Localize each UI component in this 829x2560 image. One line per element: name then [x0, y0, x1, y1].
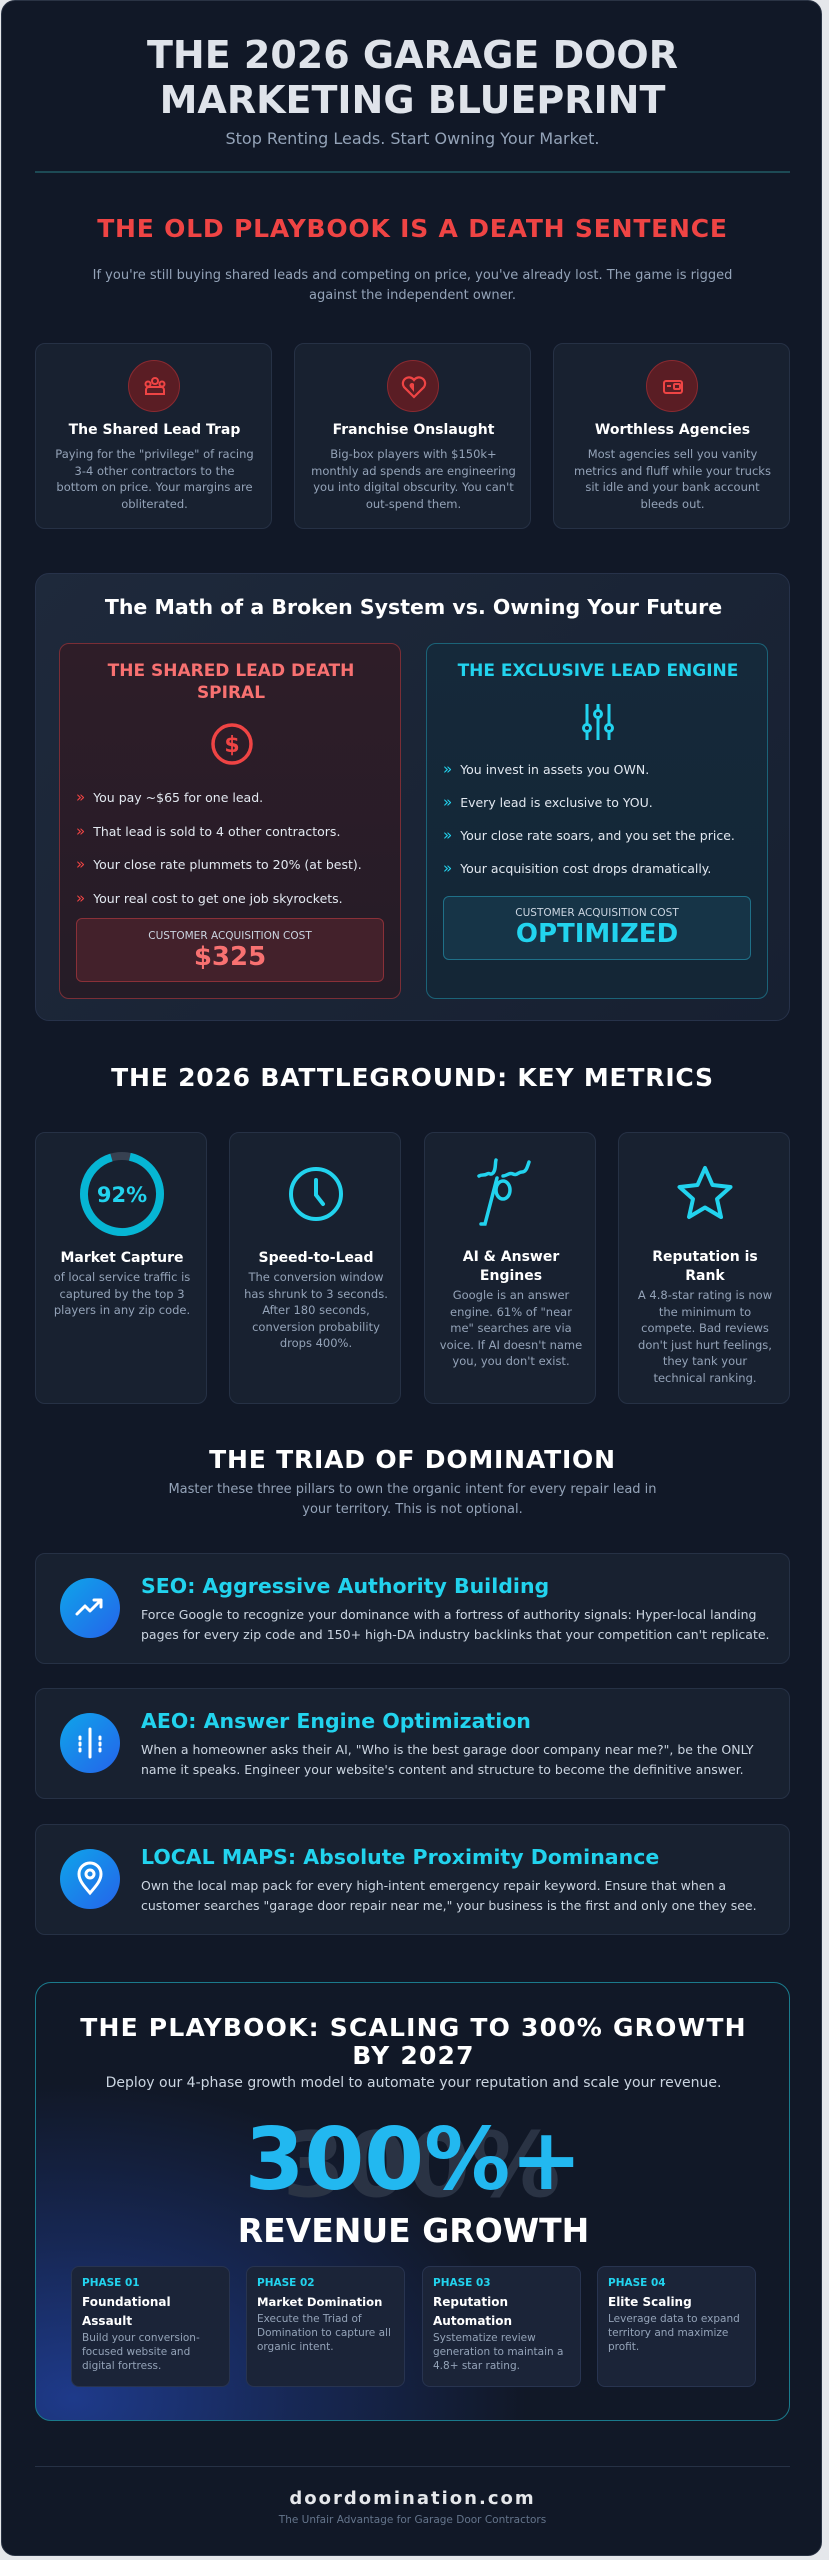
phase 02: Market Domination	[257, 2295, 382, 2309]
bullet list	[76, 788, 362, 906]
panel: SEO	[35, 1553, 790, 1664]
triad intro: Master these three pillars to own the organic intent for every repair lead in your territory. This is not optional.	[168, 1482, 657, 1517]
phase 04: Elite Scaling	[608, 2295, 692, 2309]
card text: Most agencies sell you vanity metrics and fluff while your trucks sit idle and your bank account bleeds out.	[574, 447, 771, 510]
box heading: THE EXCLUSIVE LEAD ENGINE	[458, 661, 738, 681]
card title: The Shared Lead Trap	[69, 422, 240, 438]
panel: AEO	[35, 1688, 790, 1799]
CAC box: $325: CUSTOMER ACQUISITION COST	[148, 930, 312, 942]
bullet list: » You invest in assets you OWN.	[443, 760, 649, 778]
card title: Worthless Agencies	[595, 422, 750, 438]
metric title: Engines	[480, 1268, 542, 1284]
heading	[80, 2013, 747, 2070]
bullet list	[443, 760, 735, 877]
phase 03: Systematize review generation to maintain a 4.8+ star rating.	[433, 2332, 563, 2372]
metric: speed to lead	[229, 1132, 401, 1404]
icon: voice	[60, 1713, 120, 1773]
phase 01: PHASE 01	[82, 2277, 140, 2289]
bullet list: » Your close rate plummets to 20% (at best).	[76, 855, 362, 873]
heading: triad: THE TRIAD OF DOMINATION	[209, 1445, 616, 1474]
box: shared lead death spiral	[59, 643, 401, 999]
heading: BY 2027	[352, 2041, 475, 2070]
big stat: 300%	[282, 2113, 561, 2218]
phase 01: Foundational Assault	[82, 2295, 171, 2328]
panel: metric cards	[35, 1132, 790, 1404]
metric text: The conversion window has shrunk to 3 seconds. After 180 seconds, conversion probability drops 400%.	[244, 1270, 388, 1350]
CAC box: optimized: OPTIMIZED	[516, 919, 678, 949]
icon: dollar circle: $	[224, 733, 240, 758]
icon: heart	[387, 360, 439, 412]
text: When a homeowner asks their AI, "Who is the best garage door company near me?", be the ONLY name it speaks. Engineer your website's content and structure to become the definitive answer.	[141, 1742, 754, 1777]
title: AEO: Answer Engine Optimization	[141, 1709, 531, 1733]
card: shared lead trap	[35, 343, 272, 529]
card text: Big-box players with $150k+ monthly ad spends are engineering you into digital obscurity. You can't out-spend them.	[311, 447, 516, 510]
bullet list: » Your real cost to get one job skyrockets.	[76, 888, 343, 906]
panel: playbook	[35, 1982, 790, 2421]
subtitle: Stop Renting Leads. Start Owning Your Market.	[225, 129, 600, 148]
card text: Paying for the "privilege" of racing 3-4 other contractors to the bottom on price. Your margins are obliterated.	[55, 447, 254, 510]
CAC box: optimized: CUSTOMER ACQUISITION COST	[515, 907, 679, 919]
box: exclusive lead engine	[426, 643, 768, 999]
phase 04: PHASE 04	[608, 2277, 666, 2289]
icon: people	[128, 360, 180, 412]
icon: dollar circle	[211, 723, 253, 765]
metric title: Reputation is	[652, 1249, 758, 1265]
panel: three problem cards	[35, 343, 790, 529]
bullet list: » You pay ~$65 for one lead.	[76, 788, 263, 806]
icon: squiggle signal	[477, 1158, 531, 1226]
panel: local maps	[35, 1824, 790, 1935]
phase cards	[71, 2266, 756, 2387]
intro text: If you're still buying shared leads and competing on price, you've already lost. The game is rigged against the independent owner.	[93, 268, 732, 303]
footer brand: doordomination.com	[289, 2488, 536, 2509]
bullet list: » Every lead is exclusive to YOU.	[443, 793, 653, 811]
icon: wallet	[646, 360, 698, 412]
CAC box: optimized	[443, 896, 751, 960]
metric title: Speed-to-Lead	[259, 1250, 373, 1266]
metric title	[462, 1249, 560, 1284]
phase 03	[422, 2266, 581, 2387]
phase 01: Build your conversion-focused website and digital fortress.	[82, 2332, 200, 2372]
text: Own the local map pack for every high-intent emergency repair keyword. Ensure that when a customer searches "garage door repair near me," your business is the first and only one they see.	[141, 1878, 757, 1913]
phase 02	[246, 2266, 405, 2387]
phase 02: PHASE 02	[257, 2277, 315, 2289]
bullet list: » Your acquisition cost drops dramatically.	[443, 859, 711, 877]
icon: star	[677, 1166, 732, 1220]
panel: math comparison	[35, 573, 790, 1021]
bullet list: » Your close rate soars, and you set the price.	[443, 826, 735, 844]
footer tagline: The Unfair Advantage for Garage Door Contractors	[279, 2514, 546, 2526]
phase 03: PHASE 03	[433, 2277, 491, 2289]
CAC box: $325	[76, 918, 384, 982]
metric title: AI & Answer	[463, 1249, 559, 1265]
icon: map pin	[60, 1849, 120, 1909]
text: Force Google to recognize your dominance with a fortress of authority signals: Hyper-local landing pages for every zip code and 150+ high-DA industry backlinks that your competition can't replicate.	[141, 1607, 770, 1642]
title: MARKETING BLUEPRINT	[160, 78, 665, 122]
icon: sliders	[582, 704, 614, 740]
metric text: of local service traffic is captured by the top 3 players in any zip code.	[54, 1270, 190, 1317]
CAC box: $325: $325	[194, 942, 266, 972]
title	[147, 33, 678, 122]
metric text: A 4.8-star rating is now the minimum to compete. Bad reviews don't just hurt feelings, they tank your technical ranking.	[638, 1288, 772, 1384]
phase 04	[597, 2266, 756, 2387]
phase 03: Reputation Automation	[433, 2295, 512, 2328]
card: agencies	[553, 343, 790, 529]
metric: reputation	[618, 1132, 790, 1404]
card title: Franchise Onslaught	[333, 422, 494, 438]
title: LOCAL MAPS: Absolute Proximity Dominance	[141, 1845, 659, 1869]
metric title	[652, 1249, 758, 1284]
phase 04: Leverage data to expand territory and maximize profit.	[608, 2313, 740, 2353]
metric title: Market Capture	[60, 1250, 184, 1266]
metric title: Rank	[685, 1268, 725, 1284]
metric: market capture	[35, 1132, 207, 1404]
icon: clock	[289, 1167, 343, 1221]
big stat: REVENUE GROWTH	[238, 2211, 589, 2250]
phase 01	[71, 2266, 230, 2387]
title: SEO: Aggressive Authority Building	[141, 1574, 549, 1598]
card: franchise	[294, 343, 531, 529]
phase 02: Execute the Triad of Domination to capture all organic intent.	[257, 2313, 391, 2353]
metric text: Google is an answer engine. 61% of "near me" searches are via voice. If AI doesn't name you, you don't exist.	[440, 1288, 582, 1368]
icon: trend	[60, 1578, 120, 1638]
chart: 92% ring: 92%	[97, 1183, 147, 1207]
big stat: 300%+	[245, 2110, 582, 2210]
box heading: THE SHARED LEAD DEATH SPIRAL	[108, 661, 354, 703]
bullet list: » That lead is sold to 4 other contractors.	[76, 822, 340, 840]
heading: key metrics: THE 2026 BATTLEGROUND: KEY METRICS	[111, 1063, 714, 1092]
big stat	[238, 2110, 589, 2250]
metric: AI & answer engines	[424, 1132, 596, 1404]
panel heading: The Math of a Broken System vs. Owning Your Future	[105, 595, 722, 619]
heading: THE PLAYBOOK: SCALING TO 300% GROWTH	[80, 2013, 747, 2042]
chart: 92% ring	[80, 1152, 164, 1236]
subtitle: Deploy our 4-phase growth model to automate your reputation and scale your revenue.	[106, 2075, 721, 2091]
title: THE 2026 GARAGE DOOR	[147, 33, 678, 77]
heading: old playbook: THE OLD PLAYBOOK IS A DEATH SENTENCE	[97, 214, 728, 243]
